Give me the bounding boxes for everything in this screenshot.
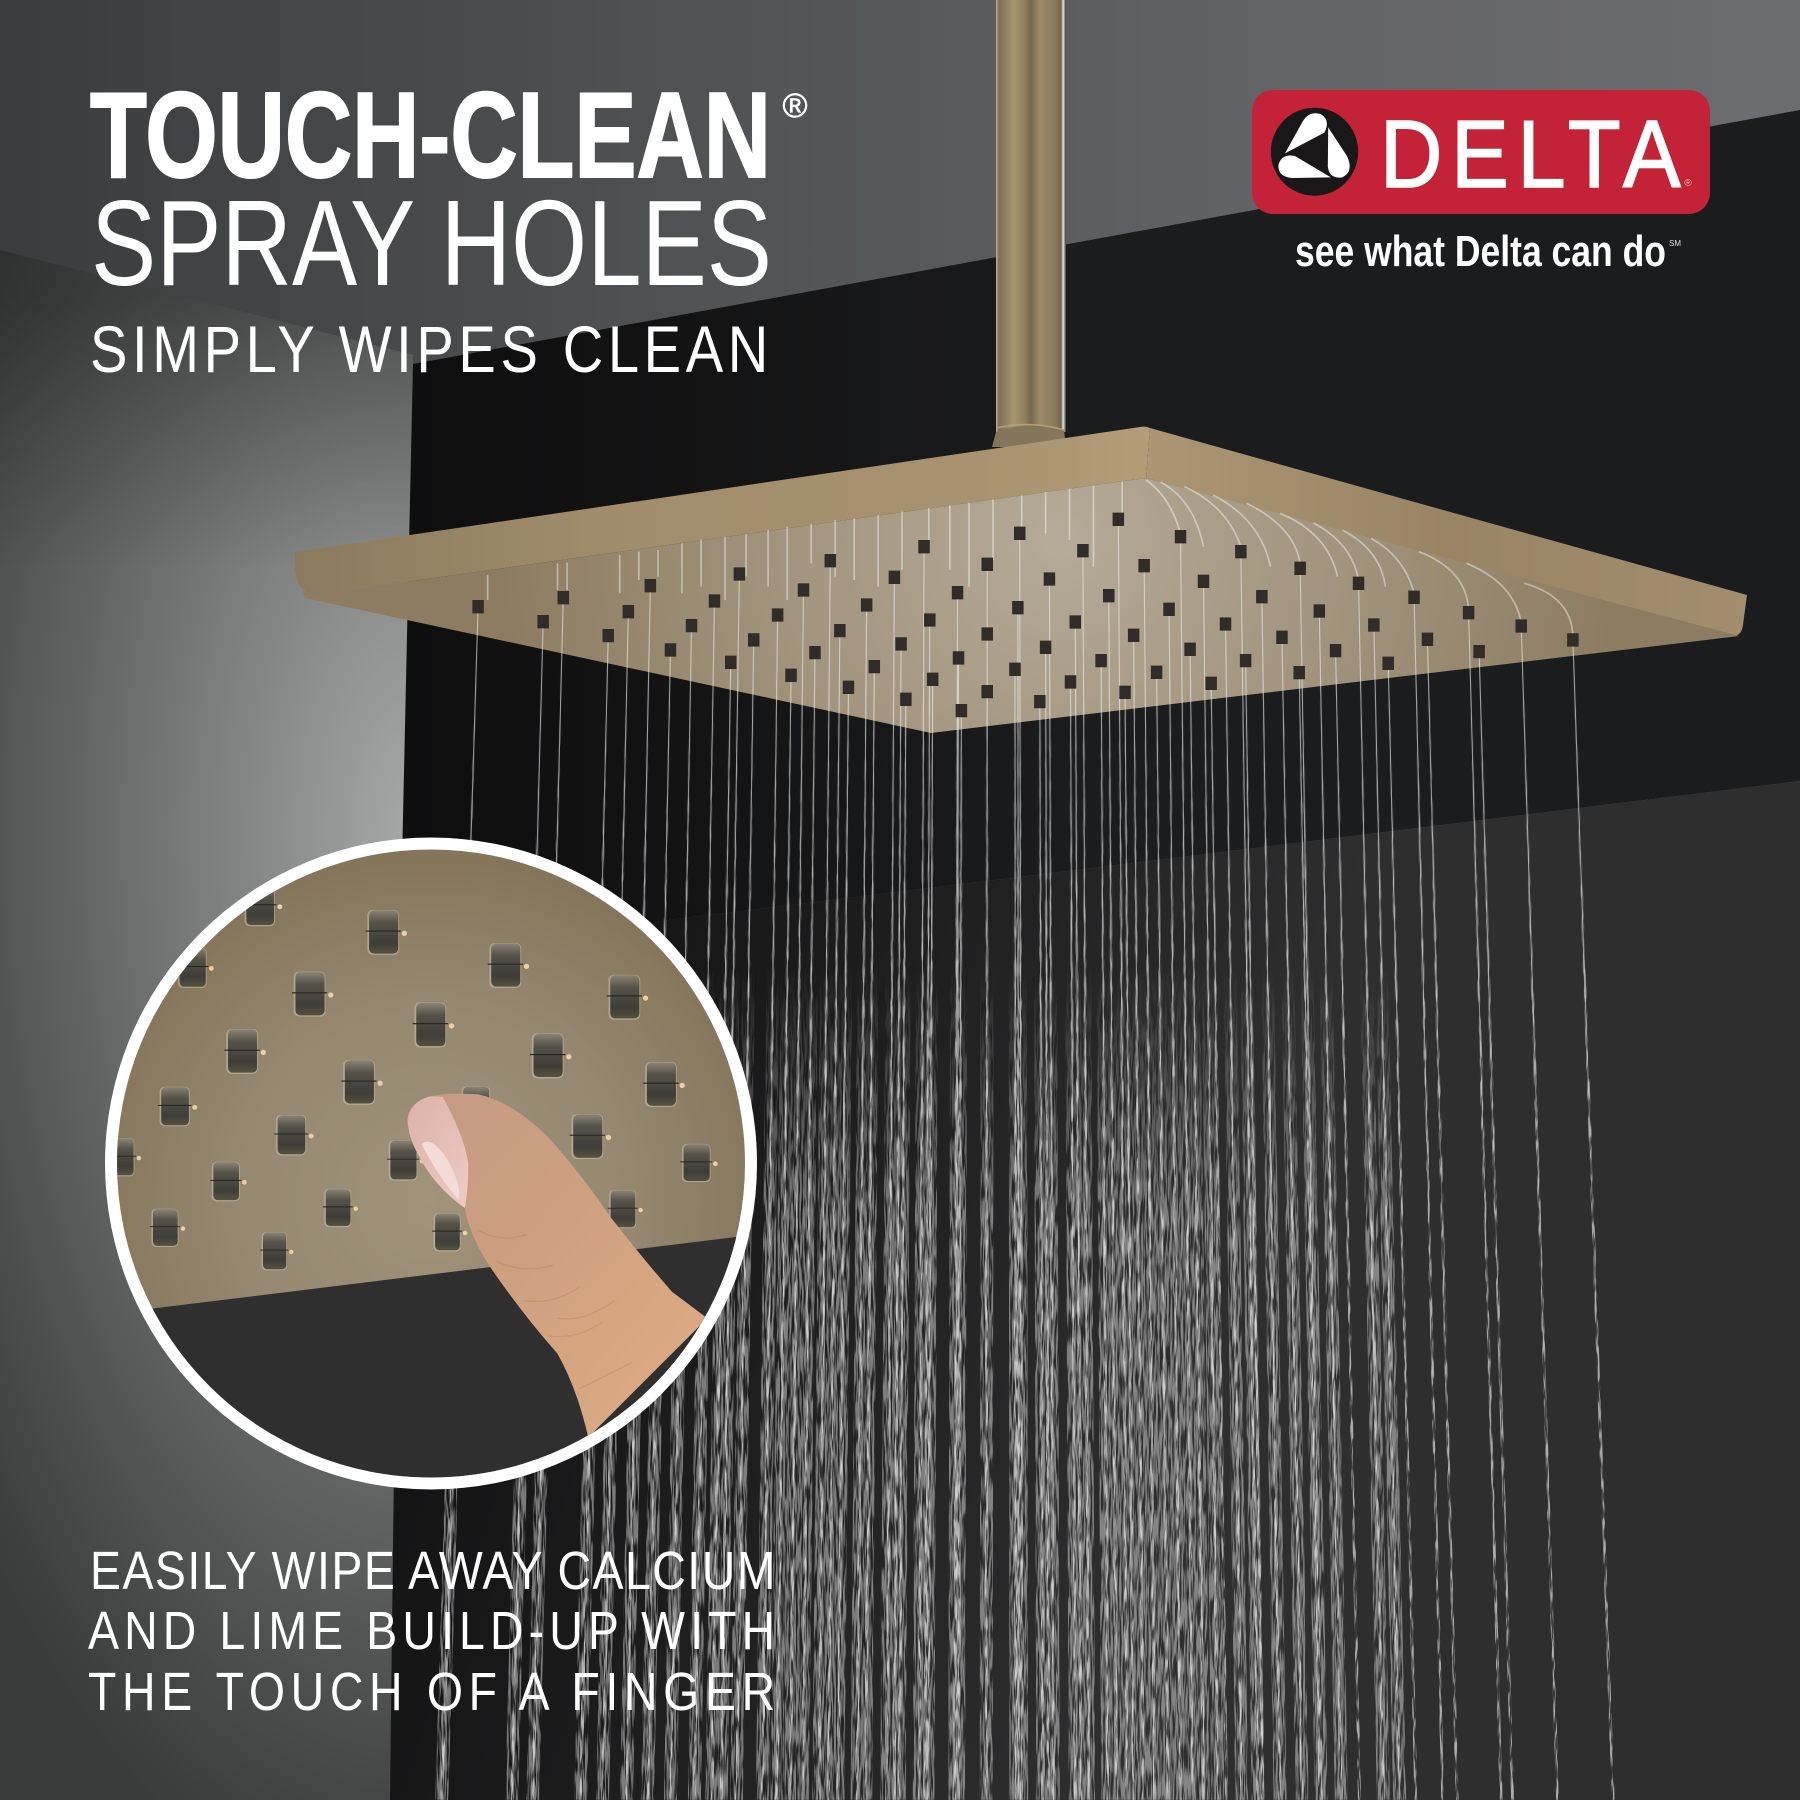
thin water lines	[442, 519, 1613, 1800]
left rim face	[295, 427, 1150, 595]
subtitle: SIMPLY WIPES CLEAN	[90, 313, 768, 386]
tagline: see what Delta can do	[1295, 227, 1666, 276]
magnified holes	[106, 886, 718, 1437]
right rim face	[1146, 428, 1747, 636]
title line 2: SPRAY HOLES	[91, 175, 772, 311]
finger	[407, 1094, 707, 1437]
title line 1: TOUCH-CLEAN	[90, 67, 771, 203]
caption	[88, 1540, 775, 1722]
caption line 3: THE TOUCH OF A FINGER	[88, 1661, 775, 1722]
water film streaks	[488, 480, 1573, 637]
service mark: SM	[1669, 239, 1681, 248]
heading	[90, 67, 808, 386]
underside plate	[302, 478, 1739, 733]
inset photo	[117, 850, 745, 1478]
shower head body	[295, 427, 1747, 733]
shower arm pipe	[992, 0, 1066, 447]
logo wordmark: DELTA	[1380, 101, 1681, 208]
fingernail	[407, 1096, 468, 1208]
falling water streams	[442, 519, 1613, 1800]
caption line 1: EASILY WIPE AWAY CALCIUM	[90, 1540, 775, 1601]
broken streams (medium streaks)	[442, 519, 1613, 1800]
inset ring	[105, 838, 757, 1490]
logo badge	[1252, 90, 1710, 214]
skin creases	[478, 1230, 632, 1389]
Delta logo	[1252, 90, 1710, 276]
logo emblem	[1271, 108, 1358, 196]
caption line 2: AND LIME BUILD-UP WITH	[88, 1600, 775, 1661]
spray holes on the shower head	[472, 513, 1579, 717]
droplet haze (wide streaks)	[442, 519, 1400, 1800]
logo registered mark: ®	[1684, 178, 1692, 189]
registered mark: ®	[782, 87, 808, 125]
magnified inset circle	[100, 830, 770, 1500]
